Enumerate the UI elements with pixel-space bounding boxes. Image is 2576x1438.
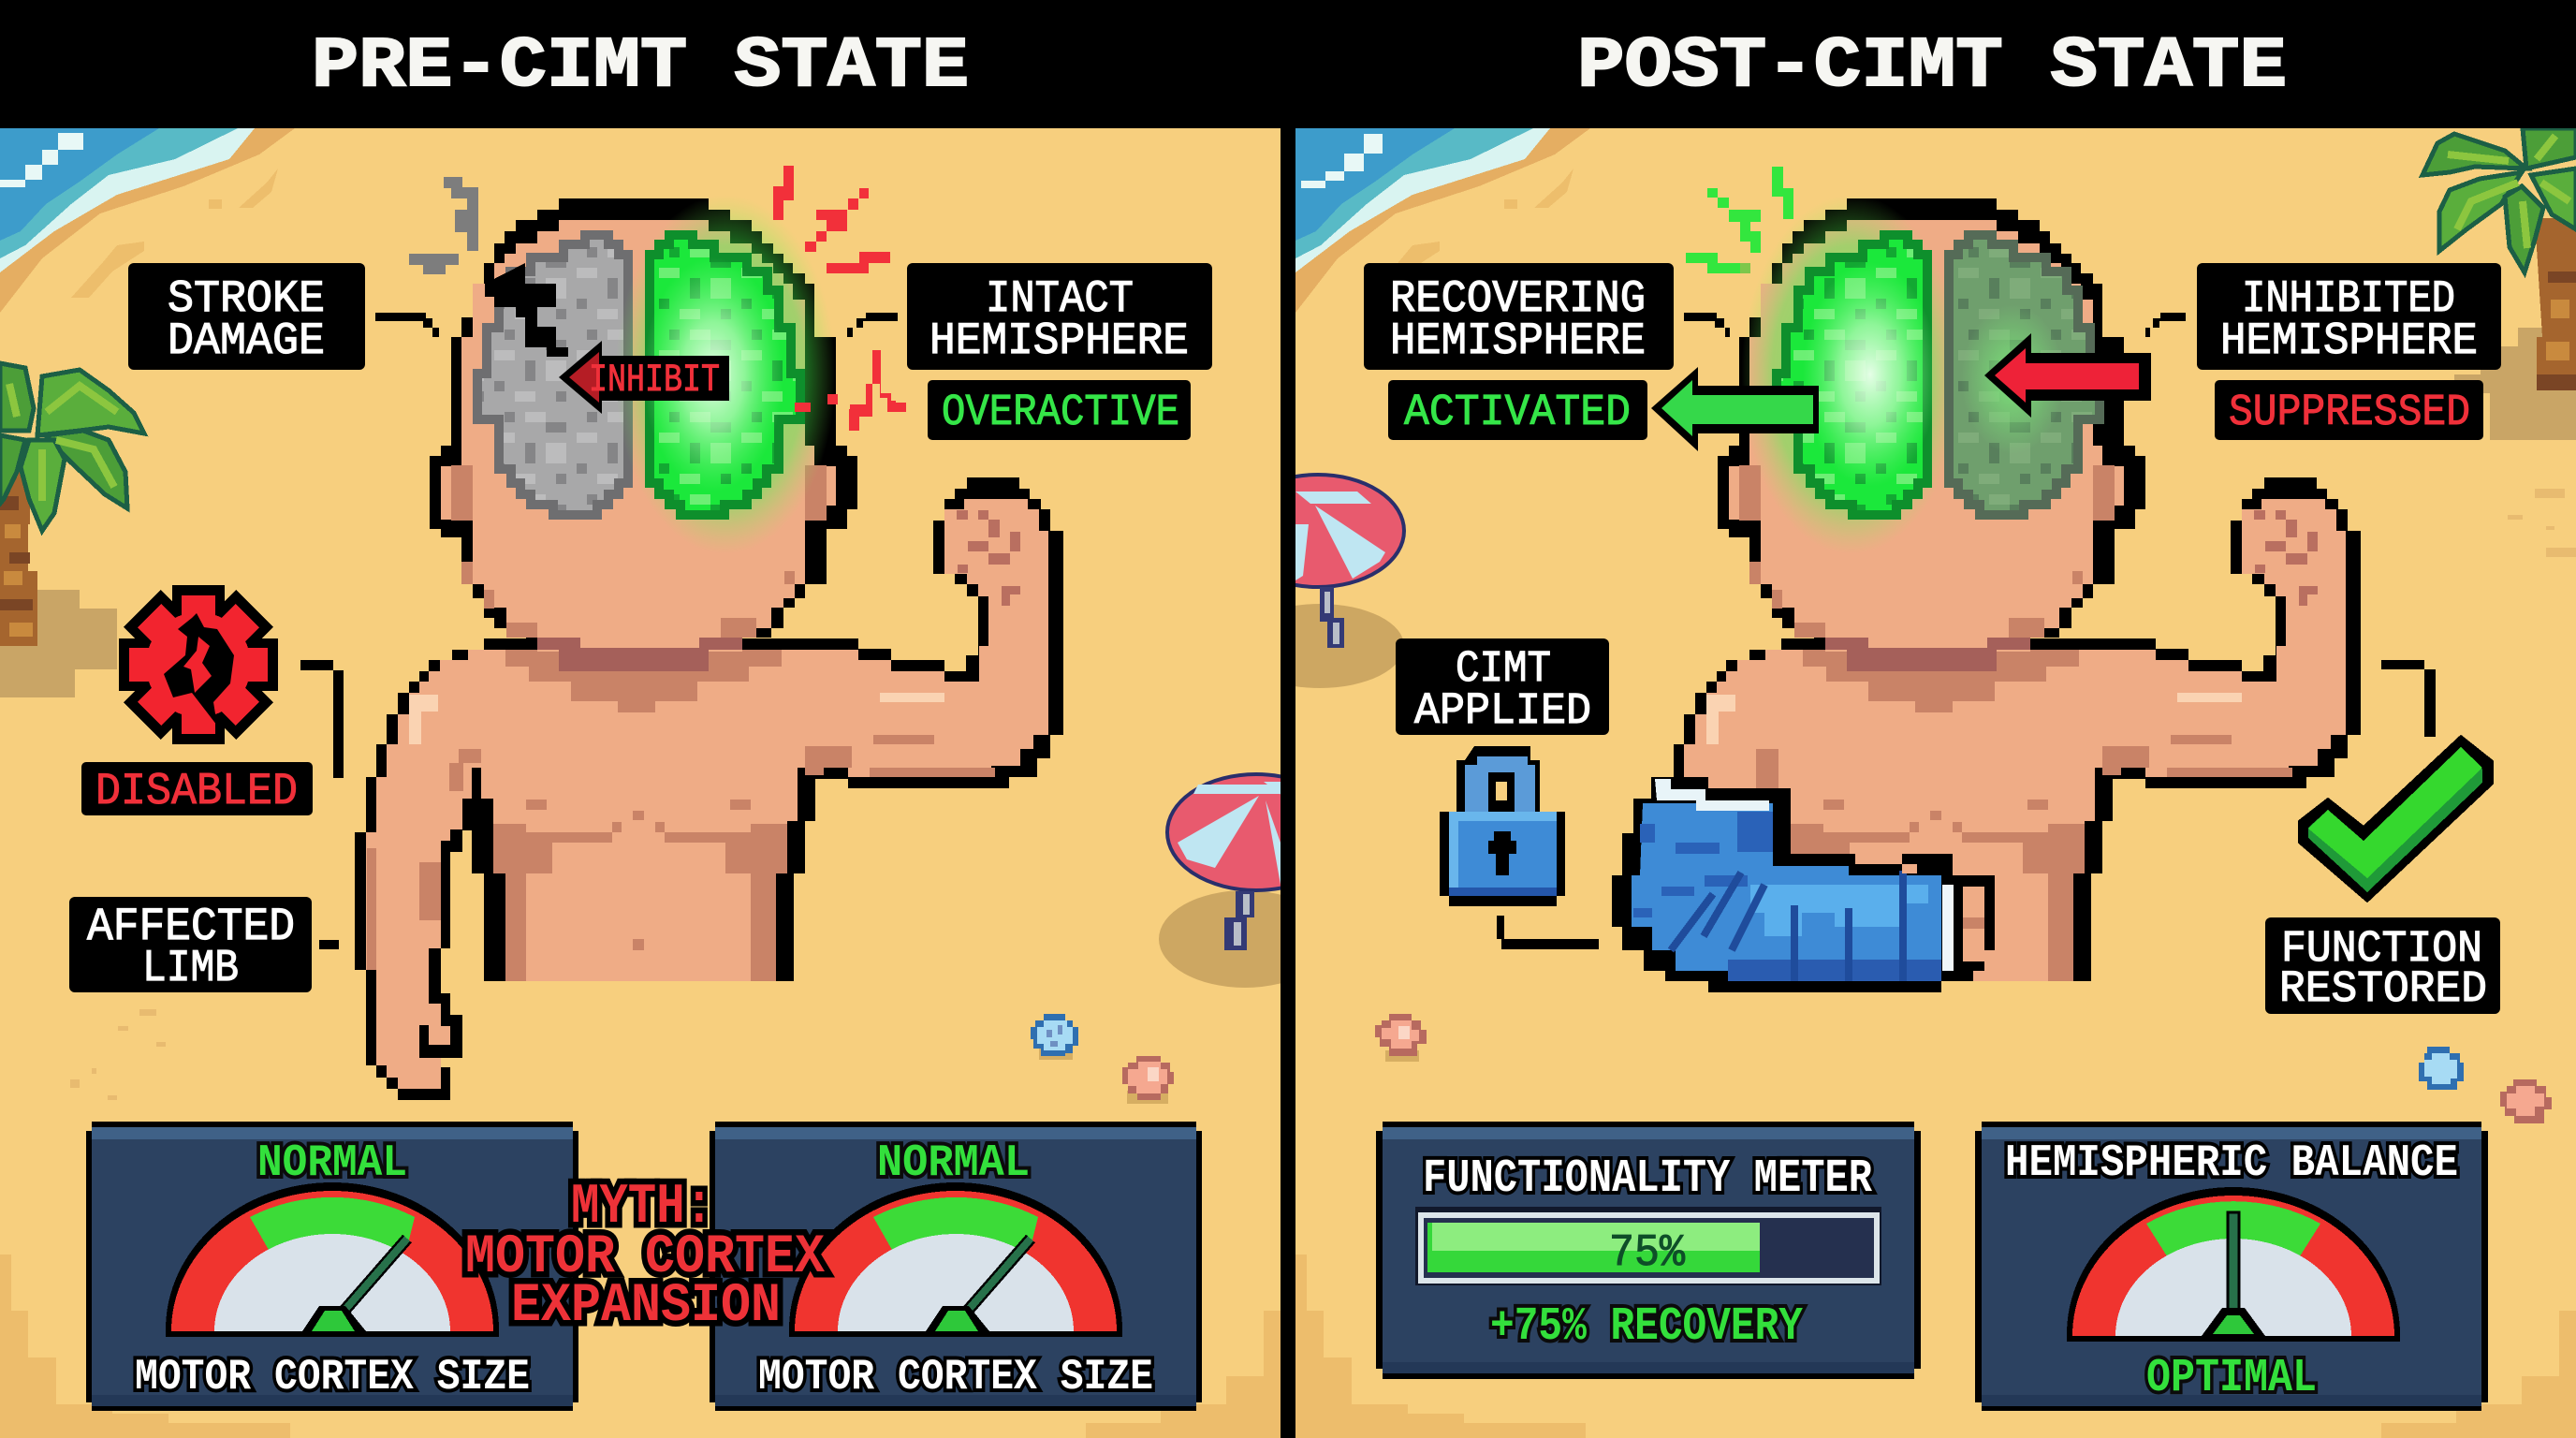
head shading	[451, 465, 827, 638]
green activation sparks	[1686, 167, 1793, 273]
gauge dial	[166, 1182, 499, 1337]
gauge dial	[789, 1182, 1122, 1337]
needle	[302, 1239, 407, 1331]
figure: pre-CIMT body	[355, 477, 1063, 1100]
arrow: inhibit	[559, 341, 729, 414]
label: intact hemisphere	[907, 263, 1212, 370]
keyhole	[1488, 831, 1516, 875]
red overactivity sparks	[773, 166, 906, 431]
crack in gear	[164, 613, 234, 726]
needle	[926, 1239, 1031, 1331]
figure: post-CIMT head	[1718, 198, 2145, 671]
beach water: post panel	[1295, 128, 1590, 313]
cast end and fingers	[1942, 885, 1954, 971]
percent value: 75%	[1609, 1228, 1685, 1279]
leader: disabled gear	[300, 660, 344, 778]
center divider	[1281, 128, 1295, 1438]
header bar	[0, 0, 2576, 128]
brain: activated green hemisphere	[1772, 230, 1938, 520]
label: inhibited hemisphere: INHIBITED	[2242, 274, 2455, 325]
shells: pre panel	[1031, 1014, 1174, 1104]
head shading	[1739, 465, 2115, 638]
panel: functionality meter	[1376, 1122, 1921, 1379]
figure: pre-CIMT head	[430, 198, 857, 671]
panel: motor cortex gauge 2	[710, 1122, 1202, 1411]
recovery value: +75% RECOVERY	[1490, 1300, 1803, 1354]
sand dunes: post panel	[1295, 1255, 2576, 1438]
head outline	[430, 198, 857, 648]
body outline	[355, 477, 1063, 1100]
progress bar	[1415, 1207, 1881, 1285]
label: CIMT applied	[1396, 638, 1609, 737]
leader: affected limb	[319, 940, 339, 949]
label: affected limb	[69, 897, 312, 994]
leader: stroke damage	[375, 313, 439, 337]
label: CIMT applied: APPLIED	[1414, 687, 1591, 737]
arm cast	[1612, 777, 1995, 992]
gauge title: MOTOR CORTEX SIZE	[135, 1353, 530, 1401]
arrow: activation	[1651, 367, 1819, 451]
heading: pre-CIMT state: PRE-CIMT STATE	[312, 26, 969, 107]
meter title: FUNCTIONALITY METER	[1423, 1152, 1872, 1206]
leader: intact hemisphere	[847, 313, 898, 337]
heading: post-CIMT state: POST-CIMT STATE	[1577, 26, 2287, 107]
brain: suppressed muted hemisphere	[1944, 230, 2104, 520]
head outline	[1718, 198, 2145, 648]
fist knuckles	[2254, 510, 2318, 606]
leader: recovering hemisphere	[1684, 313, 1730, 337]
gauge status: normal: NORMAL	[877, 1138, 1030, 1189]
palm tree: pre panel	[0, 363, 144, 697]
badge: activated: ACTIVATED	[1404, 389, 1631, 438]
highlights	[409, 693, 944, 744]
needle	[2202, 1212, 2265, 1336]
panel: motor cortex gauge 1	[86, 1122, 578, 1411]
badge: overactive: OVERACTIVE	[942, 389, 1179, 438]
body skin	[1679, 499, 2346, 981]
icon: padlock	[1440, 746, 1565, 906]
beach umbrella: post panel	[1295, 473, 1406, 688]
panel: hemispheric balance	[1975, 1122, 2488, 1411]
leader: padlock to cast	[1497, 916, 1599, 949]
balance title: HEMISPHERIC BALANCE	[2005, 1138, 2458, 1189]
fist knuckles	[957, 510, 1020, 606]
brain: overactive green hemisphere	[643, 230, 805, 520]
sand dunes: pre panel	[0, 1255, 1281, 1438]
beach water: pre panel	[0, 128, 295, 313]
figure: post-CIMT body	[1667, 477, 2361, 981]
green glow: pre	[615, 195, 836, 554]
label: affected limb: AFFECTED	[87, 901, 295, 953]
label: recovering hemisphere: HEMISPHERE	[1390, 316, 1646, 367]
label: stroke damage: STROKE	[168, 274, 325, 325]
arrow: inhibit: INHIBIT	[589, 358, 720, 403]
callout: myth: MYTH:	[571, 1176, 713, 1240]
head skin	[1729, 220, 2124, 652]
label: function restored: FUNCTION	[2281, 925, 2482, 975]
label: inhibited hemisphere	[2197, 263, 2501, 370]
grey damage bolts	[409, 183, 473, 269]
brain: damaged grey hemisphere	[473, 230, 633, 520]
label: affected limb: LIMB	[142, 944, 239, 994]
icon: checkmark	[2299, 736, 2493, 902]
body shading	[1756, 650, 2292, 981]
callout: myth: MOTOR CORTEX	[465, 1227, 825, 1288]
gauge dial	[2067, 1187, 2400, 1342]
callout: myth	[465, 1176, 825, 1337]
callout: myth: EXPANSION	[511, 1276, 781, 1337]
label: recovering hemisphere	[1364, 263, 1674, 370]
shells: post panel	[1375, 1014, 2552, 1123]
label: CIMT applied: CIMT	[1456, 645, 1551, 695]
badge: disabled: DISABLED	[95, 767, 298, 817]
label: recovering hemisphere: RECOVERING	[1390, 274, 1646, 325]
beach umbrella: pre panel	[1159, 772, 1281, 988]
label: inhibited hemisphere: HEMISPHERE	[2220, 316, 2478, 367]
sand speckles	[70, 489, 2576, 1100]
leader: check to arm	[2381, 660, 2436, 737]
cast fill	[1632, 803, 1941, 981]
crack	[485, 263, 568, 357]
head skin	[441, 220, 836, 652]
label: stroke damage: DAMAGE	[168, 316, 325, 367]
body outline	[1667, 477, 2361, 981]
label: function restored: RESTORED	[2279, 965, 2487, 1015]
body skin	[366, 499, 1048, 1089]
label: function restored	[2265, 917, 2500, 1015]
cast cuff	[1655, 779, 1769, 811]
icon: broken gear	[119, 585, 278, 744]
label: intact hemisphere: HEMISPHERE	[929, 316, 1189, 367]
gauge title: MOTOR CORTEX SIZE	[758, 1353, 1153, 1401]
label: intact hemisphere: INTACT	[986, 274, 1134, 325]
body shading	[367, 650, 995, 981]
badge: suppressed: SUPPRESSED	[2229, 389, 2470, 438]
highlights	[1706, 693, 2242, 744]
cast outline	[1612, 777, 1995, 992]
green glow: post	[1741, 195, 1962, 554]
arrow: suppression	[1984, 333, 2151, 418]
balance status: OPTIMAL	[2146, 1352, 2317, 1405]
palm tree: post panel	[2422, 128, 2576, 440]
gauge status: normal: NORMAL	[257, 1138, 407, 1189]
leader: inhibited hemisphere	[2145, 313, 2186, 337]
label: stroke damage	[128, 263, 365, 370]
